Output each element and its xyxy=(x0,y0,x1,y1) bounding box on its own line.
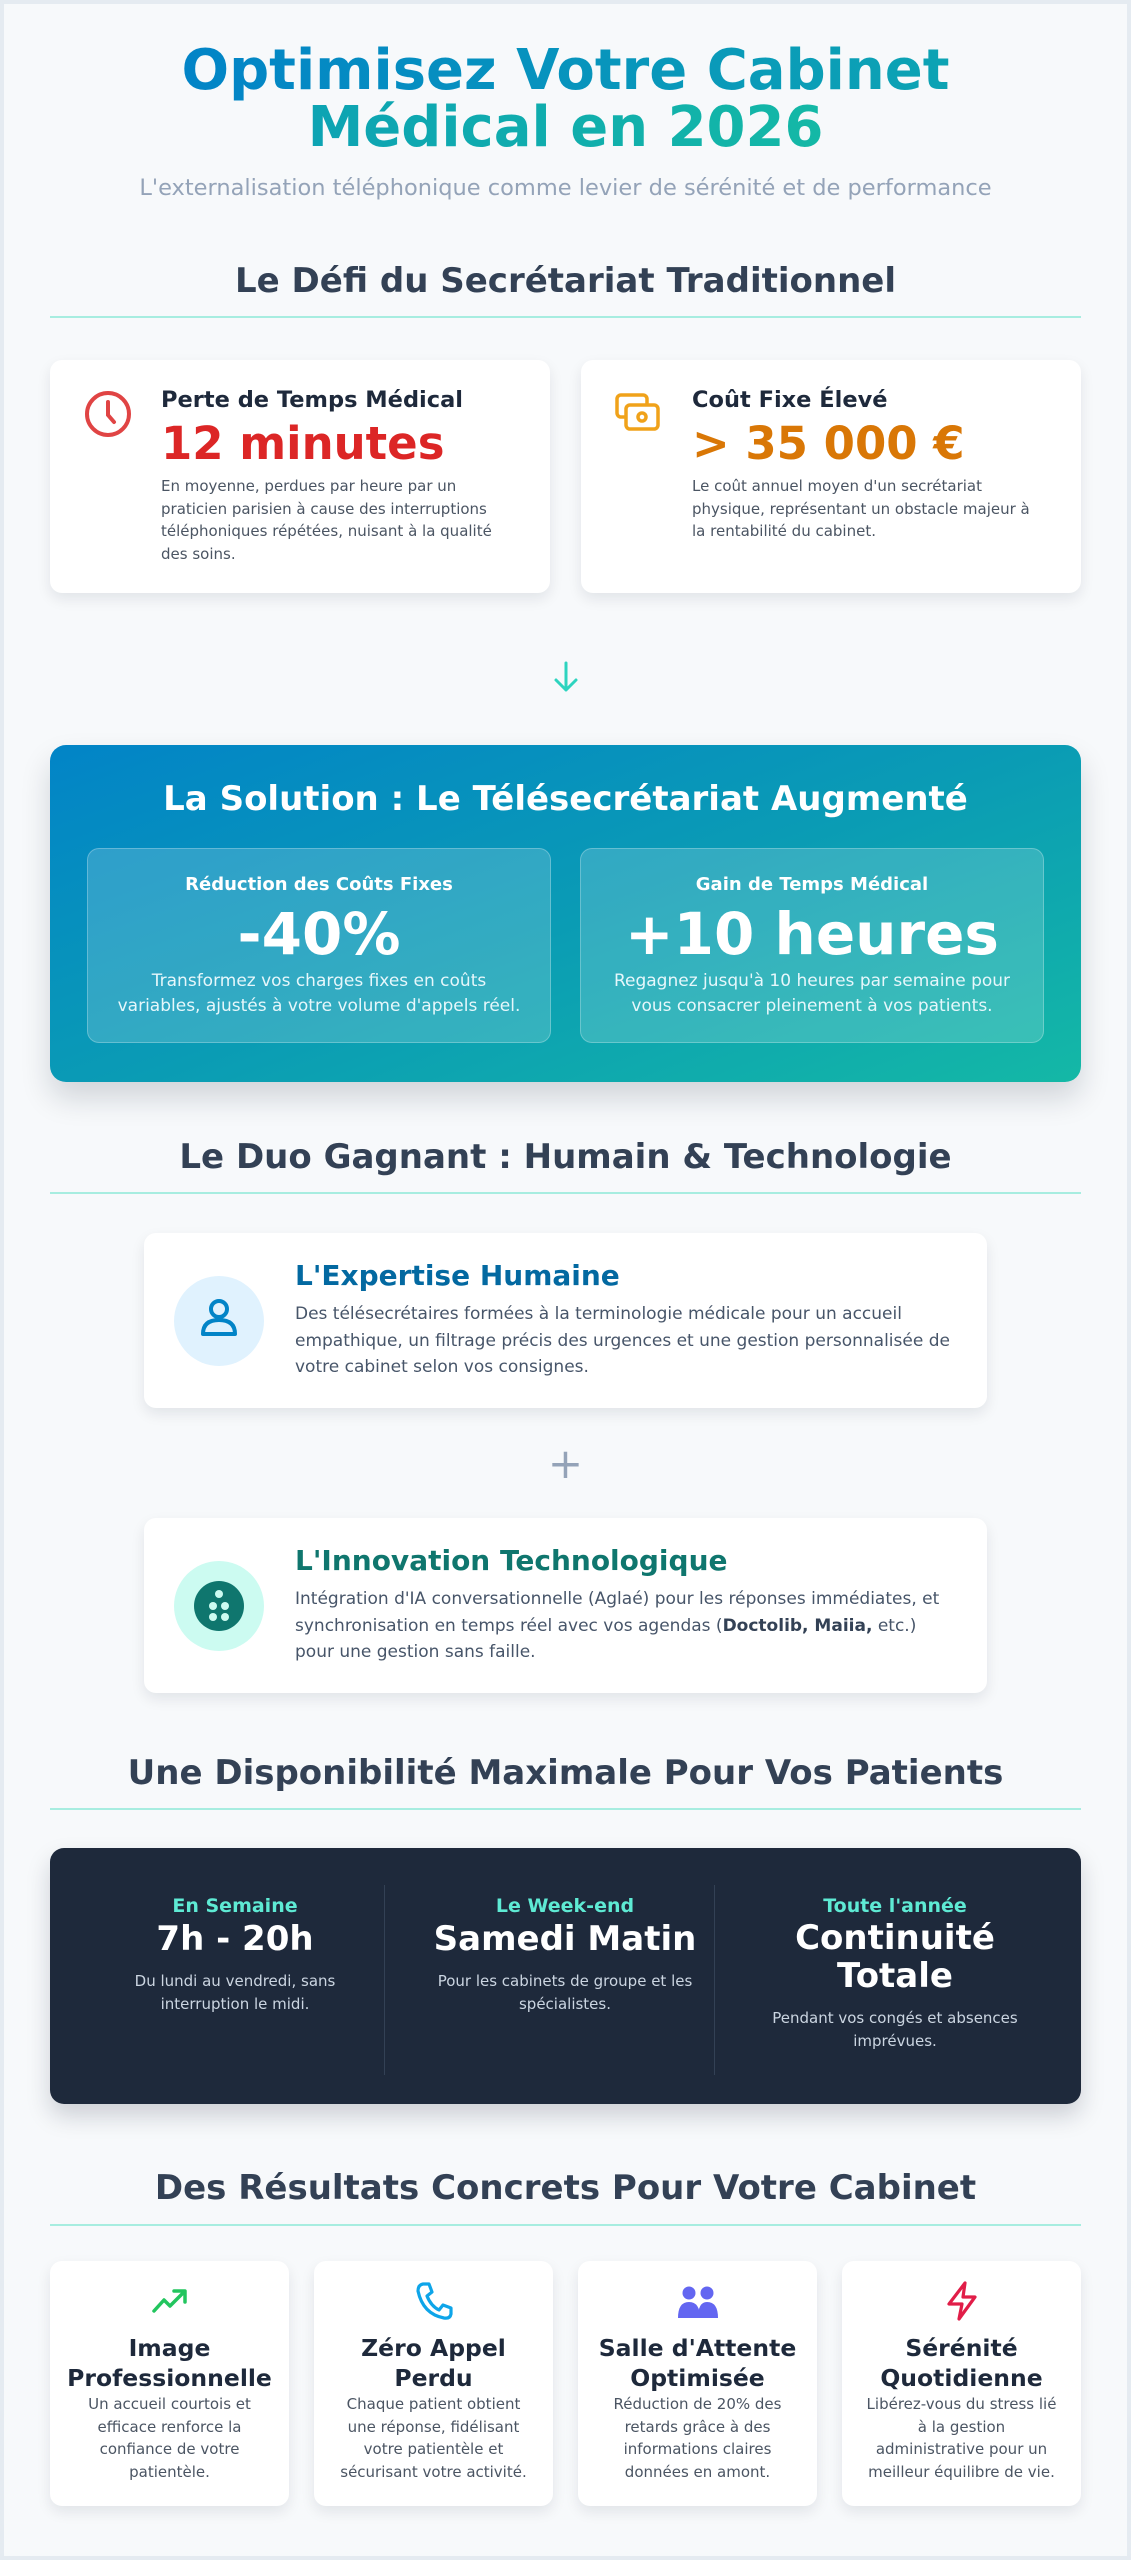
text: téléphoniques répétées, nuisant à la qualité xyxy=(161,522,492,540)
column: semaine: 7h - 20h xyxy=(156,1919,314,1959)
box: gain xyxy=(580,848,1044,1043)
stat: 12 minutes xyxy=(161,417,444,470)
column: année: Totale xyxy=(837,1956,953,1996)
card: zéro appel perdu: une réponse, fidélisant xyxy=(348,2418,519,2436)
column: année xyxy=(772,1895,1018,2050)
card: expertise humaine xyxy=(144,1233,987,1408)
card: coût fixe xyxy=(581,360,1081,593)
column: week-end: spécialistes. xyxy=(519,1995,611,2013)
column: année: Pendant vos congés et absences xyxy=(772,2009,1018,2027)
column: année: imprévues. xyxy=(853,2032,937,2050)
card: sérénité: Sérénité xyxy=(905,2334,1018,2362)
title: L'Innovation Technologique xyxy=(295,1544,728,1577)
title xyxy=(181,38,950,160)
heading: disponibilité: Une Disponibilité Maximale Pour Vos Patients xyxy=(128,1753,1003,1793)
card: zéro appel perdu: Perdu xyxy=(394,2364,473,2392)
icon: person xyxy=(174,1276,264,1366)
column: week-end: Le Week-end xyxy=(496,1895,634,1917)
card: zéro appel perdu: sécurisant votre activité. xyxy=(340,2462,527,2480)
card: sérénité: administrative pour un xyxy=(876,2440,1047,2458)
card: perte de temps xyxy=(50,360,550,593)
title: Médical en 2026 xyxy=(308,95,823,160)
card: image professionnelle: patientèle. xyxy=(129,2462,210,2480)
card: image professionnelle: Un accueil courtois et xyxy=(88,2395,251,2413)
column: semaine xyxy=(135,1895,335,2013)
title: L'Expertise Humaine xyxy=(295,1259,620,1292)
heading: duo: Le Duo Gagnant : Humain & Technologie xyxy=(179,1137,952,1177)
text: Intégration d'IA conversationnelle (Aglaé) pour les réponses immédiates, et xyxy=(295,1589,939,1609)
card: salle d'attente: retards grâce à des xyxy=(625,2418,770,2436)
card: image professionnelle: confiance de votre xyxy=(100,2440,239,2458)
card: sérénité: à la gestion xyxy=(918,2418,1005,2436)
card: salle d'attente: données en amont. xyxy=(625,2462,770,2480)
card: zéro appel perdu: votre patientèle et xyxy=(364,2440,503,2458)
card: zéro appel perdu: Chaque patient obtient xyxy=(347,2395,520,2413)
icon: phone xyxy=(416,2282,453,2320)
column: semaine: interruption le midi. xyxy=(161,1995,309,2013)
column: année: Continuité xyxy=(795,1918,995,1958)
title: Coût Fixe Élevé xyxy=(692,387,888,413)
box: réduction: Transformez vos charges fixes en coûts xyxy=(152,971,486,991)
text xyxy=(295,1589,939,1662)
card: image professionnelle xyxy=(50,2261,289,2506)
heading: résultats: Des Résultats Concrets Pour Votre Cabinet xyxy=(155,2168,976,2208)
icon: AI dots xyxy=(174,1561,264,1651)
subtitle: L'externalisation téléphonique comme levier de sérénité et de performance xyxy=(139,175,992,201)
text: des soins. xyxy=(161,544,236,562)
card: image professionnelle: Image xyxy=(129,2334,210,2362)
icon: trend xyxy=(152,2289,187,2313)
column: semaine: Du lundi au vendredi, sans xyxy=(135,1972,335,1990)
box: réduction: variables, ajustés à votre volume d'appels réel. xyxy=(118,996,520,1016)
title: Optimisez Votre Cabinet xyxy=(181,38,950,103)
column: week-end: Pour les cabinets de groupe et les xyxy=(438,1972,692,1990)
panel: availability xyxy=(50,1848,1081,2104)
column: année: Toute l'année xyxy=(823,1895,967,1917)
panel: solution xyxy=(50,745,1081,1082)
title: Perte de Temps Médical xyxy=(161,387,463,413)
text: praticien parisien à cause des interruptions xyxy=(161,500,487,518)
arrow down xyxy=(554,662,578,692)
card: innovation technologique xyxy=(144,1518,987,1693)
solution title: La Solution : Le Télésecrétariat Augmenté xyxy=(163,779,968,819)
card: sérénité: Quotidienne xyxy=(880,2364,1043,2392)
text: votre cabinet selon vos consignes. xyxy=(295,1357,589,1377)
card: salle d'attente: informations claires xyxy=(624,2440,771,2458)
box: gain: vous consacrer pleinement à vos patients. xyxy=(631,996,993,1016)
column: week-end xyxy=(434,1895,696,2013)
icon: users xyxy=(678,2286,718,2318)
text: synchronisation en temps réel avec vos agendas (Doctolib, Maiia, etc.) xyxy=(295,1616,916,1636)
card: salle d'attente: Salle d'Attente xyxy=(599,2334,796,2362)
box: réduction xyxy=(87,848,551,1043)
card: zéro appel perdu xyxy=(314,2261,553,2506)
text xyxy=(295,1304,950,1377)
text xyxy=(161,477,492,562)
card: zéro appel perdu: Zéro Appel xyxy=(361,2334,506,2362)
card: sérénité xyxy=(842,2261,1081,2506)
stat: > 35 000 € xyxy=(692,417,965,470)
card: image professionnelle: Professionnelle xyxy=(67,2364,272,2392)
icon: bolt xyxy=(947,2281,977,2321)
box: gain: Regagnez jusqu'à 10 heures par semaine pour xyxy=(614,971,1010,991)
box: gain: +10 heures xyxy=(625,900,999,968)
icon: money xyxy=(615,393,660,431)
card: salle d'attente: Optimisée xyxy=(630,2364,765,2392)
icon: clock xyxy=(85,391,131,437)
box: réduction: -40% xyxy=(238,900,400,968)
text: Le coût annuel moyen d'un secrétariat xyxy=(692,477,982,495)
text: la rentabilité du cabinet. xyxy=(692,522,876,540)
card: sérénité: Libérez-vous du stress lié xyxy=(867,2395,1056,2413)
card: salle d'attente xyxy=(578,2261,817,2506)
text: Des télésecrétaires formées à la terminologie médicale pour un accueil xyxy=(295,1304,902,1324)
text: pour une gestion sans faille. xyxy=(295,1642,536,1662)
card: sérénité: meilleur équilibre de vie. xyxy=(868,2462,1055,2480)
plus sign: + xyxy=(548,1439,583,1488)
heading: défi: Le Défi du Secrétariat Traditionnel xyxy=(235,261,896,301)
card: image professionnelle: efficace renforce la xyxy=(98,2418,241,2436)
text: physique, représentant un obstacle majeur à xyxy=(692,500,1030,518)
column: semaine: En Semaine xyxy=(172,1895,298,1917)
text: En moyenne, perdues par heure par un xyxy=(161,477,456,495)
card: salle d'attente: Réduction de 20% des xyxy=(614,2395,781,2413)
box: réduction: Réduction des Coûts Fixes xyxy=(185,874,453,895)
box: gain: Gain de Temps Médical xyxy=(696,874,928,895)
text: empathique, un filtrage précis des urgences et une gestion personnalisée de xyxy=(295,1330,950,1350)
text xyxy=(692,477,1030,540)
column: week-end: Samedi Matin xyxy=(434,1919,696,1959)
